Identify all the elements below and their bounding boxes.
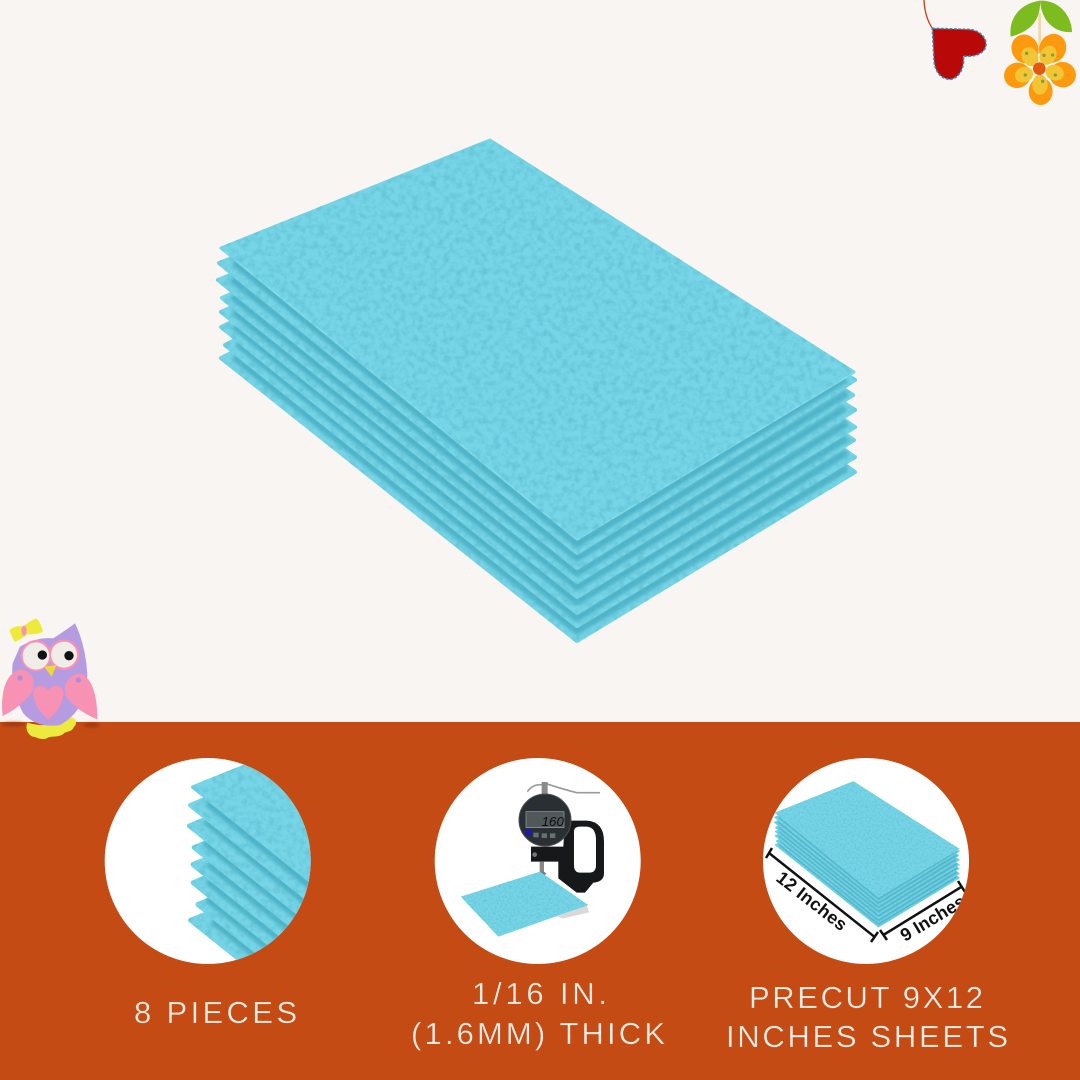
circle image: stack with dimensions xyxy=(763,758,969,964)
circle image: stack edge close-up xyxy=(104,758,311,964)
circle image: stack with dimensions: 12 Inches xyxy=(773,867,851,935)
icon: purple felt owl xyxy=(1,618,100,739)
label: thickness: 1/16 IN. xyxy=(472,976,607,1011)
panel: 8 pieces xyxy=(104,758,311,1024)
icon: orange felt flower with leaves xyxy=(1001,1,1079,105)
label: size xyxy=(726,980,1008,1054)
circle image: stack with dimensions: 9 Inches xyxy=(897,891,969,945)
orange lower band xyxy=(0,722,1080,1080)
label: size: PRECUT 9X12 xyxy=(749,980,983,1015)
circle image: thickness gauge on felt sheet: 160 xyxy=(542,814,564,829)
main felt sheet stack xyxy=(218,140,855,641)
label: thickness: (1.6MM) THICK xyxy=(411,1016,665,1051)
circle image: thickness gauge on felt sheet xyxy=(435,758,641,964)
panel: thickness xyxy=(411,758,665,1051)
panel: size xyxy=(726,758,1008,1054)
label: thickness xyxy=(411,976,665,1051)
icon: red felt heart with string xyxy=(924,0,986,79)
label: size: INCHES SHEETS xyxy=(726,1019,1008,1054)
label: 8 pieces: 8 PIECES xyxy=(134,995,297,1030)
